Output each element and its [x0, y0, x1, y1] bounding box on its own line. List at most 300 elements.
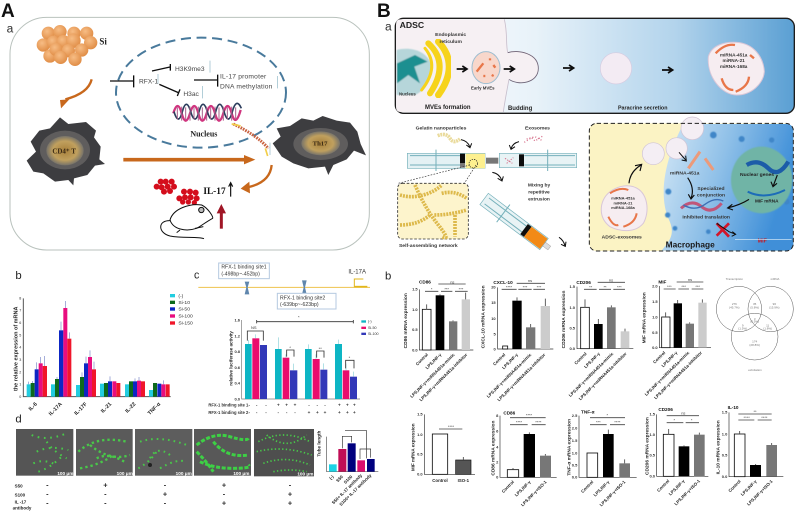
row labels: RFX-1 binding site 1 [208, 403, 249, 408]
chart: IL-10: 1.5 [722, 410, 728, 415]
chart: IL-10: 1.0 [722, 431, 728, 436]
chart: MIF: *** [695, 284, 700, 289]
chart: Venn diagram: 174 [752, 340, 757, 344]
chart: Venn diagram: (45.7%) [729, 305, 740, 309]
chart: MIF ISO-1: 1.0 [417, 432, 423, 437]
significance labels [251, 314, 351, 360]
label: IL-17A and gene mark [348, 269, 367, 287]
icon: mRNA strand [233, 124, 268, 148]
image 2 [76, 429, 133, 476]
chart: CD86: ns [450, 279, 454, 284]
chart: CXCL-10: LPS,INF-γ+miRNA451a-inhibitor [496, 352, 547, 402]
icon: exosome dots [524, 136, 543, 142]
chart: Venn diagram: 276 [732, 302, 737, 306]
chart: CD86: * [431, 286, 433, 291]
icon: nucleus [397, 49, 431, 95]
bud outline [508, 52, 538, 83]
chart: MIF: *** [681, 284, 686, 289]
row signs: + [338, 403, 341, 408]
chart: MIF ISO-1: 1.5 [417, 412, 423, 417]
chart: CD86 ISO-1: 2 [496, 460, 499, 465]
y ticks: 0.8 [234, 349, 241, 354]
icon: ADSC exosome [601, 186, 647, 231]
chart: MIF: LPS,INF-γ+miRNA451a-mimic [644, 350, 691, 397]
image 2: 100 μm [117, 471, 133, 476]
icon: right syringe [499, 150, 577, 171]
arrow: to mixing syringe [492, 172, 503, 181]
chart: TNF-α: * [607, 413, 609, 418]
chart: CD206: 0.5 [569, 325, 576, 330]
arrow: red up [217, 204, 226, 229]
binding site marker 2 [302, 280, 307, 294]
row signs: + [288, 490, 292, 499]
inset: self-assembling network [398, 183, 468, 239]
row signs: + [288, 498, 292, 507]
chart: CD206 ISO-1: * [691, 418, 693, 423]
cell: CD4 T [27, 117, 105, 185]
chart: CD206: LPS,INF-γ+miRNA451a-mimic [568, 351, 615, 398]
y axis ticks: 5 [19, 333, 21, 337]
icon: mouse [161, 205, 213, 239]
x labels: IL-6 [28, 401, 39, 412]
chart: Venn diagram: 9 [742, 324, 744, 328]
x labels: IL-17A [48, 401, 64, 417]
row signs: - [256, 403, 258, 408]
row signs: + [222, 498, 226, 507]
chart: CD206 ISO-1: 1.5 [649, 412, 656, 417]
icon: mixing syringe [477, 190, 556, 257]
label: MIF: MIF [758, 238, 768, 244]
icon: exosome with miRNA: miRNA-168a [720, 64, 748, 69]
chart: CXCL-10: CXCL-10 [493, 280, 513, 285]
chart: CD86 ISO-1: 0 [496, 475, 499, 480]
chart: TNF-α [566, 409, 637, 507]
chart: TNF-α: LPS,INF-γ [592, 479, 611, 498]
arrow: exosomes into syringe [509, 142, 519, 149]
sub-label b: b [15, 270, 22, 282]
row labels [208, 403, 249, 415]
label: Specialized conjunction: conjunction [697, 192, 725, 198]
label: Budding: Budding [508, 106, 533, 112]
y axis ticks: 2 [19, 370, 21, 374]
arrow: mRNA to translation [728, 199, 749, 210]
panel: B-a macrophage [589, 117, 793, 251]
row signs [46, 480, 292, 507]
arrow: exosome to macrophage [629, 164, 642, 183]
label: Mixing by repetitive extrusion: repetitive [528, 190, 550, 196]
row signs: - [164, 498, 167, 507]
row signs: - [46, 498, 49, 507]
row signs [249, 403, 356, 415]
icon: MIF mRNA [748, 190, 785, 195]
chart: CD206 ISO-1: 1.0 [649, 432, 656, 437]
chart: TNF-α: LPS,INF-γ+ISO-1 [599, 479, 627, 507]
panel: B-a hydrogel syringes [398, 126, 577, 257]
chart: CD206: ns [609, 277, 613, 282]
vesicles [642, 117, 704, 165]
chart: Venn diagram: Transcription [726, 277, 743, 281]
chart: MIF: 0.0 [652, 345, 658, 350]
y ticks: 0.0 [234, 396, 241, 401]
chart: CD86 ISO-1: 4 [496, 444, 499, 449]
row signs: - [265, 403, 267, 408]
chart: MIF: Control [652, 350, 666, 365]
icon: nuclear gene DNA [747, 162, 788, 172]
chart: CD86 ISO-1 [490, 410, 557, 507]
icon: connector [486, 158, 498, 164]
chart: TNF-α: Control [580, 480, 594, 494]
chart: CD86: 1.5 [412, 287, 418, 292]
chart: CXCL-10: Control [492, 352, 506, 367]
chart: CD206: 1.5 [569, 284, 576, 289]
label: Nucleus: Nucleus [399, 92, 416, 97]
row signs: + [353, 410, 356, 415]
significance labels: * [289, 345, 291, 350]
row signs: + [308, 410, 311, 415]
chart: CD86: *** [459, 286, 464, 291]
icon: blocked translation cross [717, 223, 736, 237]
panel: B-a exosome formation diagram [385, 18, 794, 113]
chart: CD206 ISO-1: LPS,INF-γ+ISO-1 [673, 478, 701, 506]
panel: B-b top row bar charts [385, 270, 793, 402]
row signs: - [256, 410, 258, 415]
label: Exosomes: Exosomes [525, 126, 550, 132]
label: Nuclear genes: Nuclear genes [740, 172, 774, 178]
y ticks: 1.6 [234, 317, 241, 322]
chart: MIF [642, 277, 711, 400]
icon: silica particle cluster [37, 25, 97, 66]
label: Macrophage: Macrophage [666, 240, 715, 250]
chart: CD86: 0.5 [412, 327, 418, 332]
chart: Venn diagram: 96 [773, 302, 776, 306]
chart: TNF-α: 2.5 [572, 413, 578, 418]
IL-6 bars [27, 363, 47, 397]
chart: MIF: 0.5 [652, 330, 658, 335]
chart: CD206: LPS,INF-γ [583, 351, 601, 369]
panel: A-b bar chart of relative mRNA expression [13, 270, 193, 417]
chart: MIF ISO-1: ISO-1 [458, 478, 470, 483]
chart: MIF: 1.0 [652, 314, 658, 319]
chart: IL-10: **** [744, 415, 750, 420]
icon: ADSC exosome: miRNA-168a [611, 205, 636, 210]
y axis ticks: 4 [19, 346, 21, 350]
chart: TNF-α: 1.5 [572, 438, 578, 443]
panel: A heading: A [1, 1, 15, 22]
panel: B heading: B [377, 1, 391, 22]
icon: released miRNA [688, 152, 713, 170]
row signs: - [249, 403, 251, 408]
row signs: - [324, 403, 326, 408]
chart: MIF: ns [688, 277, 692, 282]
x labels: S100+ IL-17 antibody [338, 472, 373, 507]
sub-label c: c [194, 270, 200, 282]
row signs: + [285, 403, 288, 408]
chart: CD86 ISO-1: 8 [496, 413, 499, 418]
binding site marker 1 [245, 282, 249, 294]
chart: MIF ISO-1: 0.5 [417, 452, 423, 457]
panel: A schematic [7, 17, 369, 250]
arrow 4 [662, 67, 673, 73]
promoter line [198, 286, 370, 289]
sub-label b: b [385, 270, 391, 282]
arrowhead [244, 155, 255, 164]
small up arrows [158, 61, 278, 155]
row signs: + [222, 480, 226, 489]
diagram frame [395, 18, 794, 113]
y axis ticks: 7 [19, 309, 21, 313]
y axis [242, 320, 360, 399]
line: MIF [735, 238, 792, 240]
chart: IL-10 [716, 405, 783, 507]
row signs: - [278, 410, 280, 415]
IL-17F bars [76, 357, 96, 397]
row signs: + [338, 410, 341, 415]
y axis ticks: 0 [19, 395, 21, 399]
chart: CD86 ISO-1: LPS,INF-γ [514, 479, 532, 498]
chart: CD86: 1.0 [412, 307, 418, 312]
chart: CD206: CD206 mRNA expression [561, 291, 567, 348]
bars [329, 443, 375, 472]
x labels: IL-21 [100, 401, 113, 415]
chart: CD206: ** [589, 284, 593, 289]
chart: IL-10: IL-10 mRNA expression [716, 420, 722, 474]
chart: CD86: CD86 [419, 279, 431, 284]
arrow: Th17 to IL-17 [241, 165, 272, 193]
row signs: + [316, 410, 319, 415]
legend: Si-10 [178, 300, 190, 306]
chart: Venn diagram: (1.5%) [738, 326, 747, 330]
label: Nucleus: Nucleus [190, 130, 217, 139]
dashed frame [589, 123, 793, 251]
chart: Venn diagram: exfoliation [748, 368, 762, 372]
row signs: - [265, 410, 267, 415]
icon: ADSC exosome: miRNA-21 [613, 200, 633, 205]
image 3 [135, 429, 192, 476]
inhibitor: RFX-1 to H3K9me3 [152, 64, 170, 71]
arrow: genes to mRNA [771, 175, 777, 187]
y ticks [234, 317, 241, 401]
row labels: RFX-1 binding site 2 [208, 410, 249, 415]
chart: CXCL-10: 5 [493, 331, 496, 336]
chart: CD86 ISO-1: **** [526, 413, 533, 418]
chart: CXCL-10: LPS,INF-γ+miRNA451a-mimic [486, 352, 533, 399]
chart: Venn diagram: (5.8%) [750, 305, 759, 309]
chart: IL-10: Control [727, 479, 742, 493]
chart: CD86: CD86 mRNA expression [403, 293, 409, 348]
callout: binding site 1 [219, 263, 269, 279]
chart: CXCL-10: 10 [491, 316, 496, 321]
chart: CD86 ISO-1: CD86 mRNA expression [490, 421, 496, 476]
IL-21 bars [100, 381, 120, 397]
significance labels: ** [319, 346, 322, 351]
chart: CD86 ISO-1: 6 [496, 428, 499, 433]
label: Inhibited translation: Inhibited translation [682, 214, 730, 220]
row signs: - [46, 490, 49, 499]
x labels: S50+ IL-17 antibody [331, 472, 363, 505]
chart: CD206: 0.0 [569, 346, 576, 351]
chart: MIF ISO-1: **** [448, 424, 455, 429]
y axis title: relative luciferase activity [229, 331, 234, 386]
row signs: - [317, 403, 319, 408]
y axis ticks [19, 297, 21, 399]
inhibitor: to promoter [194, 75, 218, 87]
icon: vesicle [600, 53, 632, 84]
chart: CD206: CD206 [576, 280, 591, 285]
callout: binding site 1: (-498bp~-452bp) [221, 272, 260, 278]
chart: CD206 ISO-1: 0.0 [649, 474, 656, 479]
arrow: miRNA down [688, 178, 694, 199]
chart: Venn diagram: 35 [753, 302, 757, 306]
chart: IL-10: 0.5 [722, 452, 728, 457]
chart: CD86 ISO-1: **** [516, 420, 523, 425]
x labels [28, 401, 163, 417]
label: IL-17A and gene mark: IL-17A [348, 269, 366, 275]
chart: CXCL-10: *** [537, 284, 542, 289]
icon: exosome with miRNA: miRNA-21 [723, 58, 745, 63]
row signs: + [103, 480, 107, 489]
x labels: TNF-α [147, 401, 163, 417]
chart: TNF-α: 2.0 [572, 425, 578, 430]
chart: Venn diagram: (28.8%) [749, 343, 760, 347]
chart: CXCL-10: **** [506, 284, 513, 289]
cell: CD4 T: CD4⁺ T [52, 147, 76, 155]
chart: TNF-α: TNF-α mRNA expression [566, 419, 572, 476]
chart: TNF-α: 0.5 [572, 463, 578, 468]
chart: CD86: 0.0 [412, 347, 418, 352]
legend: (-) [178, 293, 184, 299]
chart: TNF-α: 1.0 [572, 450, 578, 455]
nucleus dashed ellipse [116, 38, 286, 148]
chart: CD86 ISO-1: **** [535, 420, 542, 425]
label: Gelatin nanoparticles: Gelatin nanoparticles [416, 126, 467, 132]
macrophage body [662, 124, 793, 251]
icon: exosome with miRNA [708, 42, 764, 95]
callout: binding site 2: RFX-1 binding site2 [280, 296, 325, 302]
panel frame [10, 17, 369, 250]
icon: endoplasmic reticulum [422, 42, 449, 95]
icon: ADSC exosome: miRNA-451a [611, 196, 636, 201]
chart: CD206: LPS,INF-γ+miRNA451a-inhibitor [578, 351, 628, 401]
region: cell cytoplasm [396, 19, 538, 112]
y ticks: 1.2 [234, 333, 241, 338]
x labels: S100 [343, 474, 354, 485]
row labels [13, 483, 32, 510]
label: miRNA-451a: miRNA-451a [670, 170, 700, 176]
row labels: IL -17 [15, 500, 27, 505]
bars group 1 [245, 338, 267, 399]
image 4 [194, 429, 251, 476]
image 3: 100 μm [176, 471, 192, 476]
row labels: S100 [15, 492, 26, 497]
chart: Venn diagram: (15.9%) [769, 305, 780, 309]
chart: CD86 ISO-1: Control [501, 480, 515, 494]
chart: CD206 ISO-1: CD206 [658, 407, 673, 412]
image 1: 100 μm [57, 471, 73, 476]
legend [170, 293, 193, 327]
row labels: antibody [13, 505, 32, 510]
callout lines to inset [398, 165, 476, 183]
significance brackets [247, 320, 354, 368]
chart: CXCL-10: ns [528, 278, 532, 283]
row signs: + [324, 410, 327, 415]
significance labels: * [349, 355, 351, 360]
chart: MIF: LPS,INF-γ [660, 350, 679, 368]
chart: TNF-α: TNF-α [581, 409, 595, 414]
chart: CD206: ** [603, 284, 607, 289]
chart: MIF ISO-1 [410, 412, 475, 483]
chart: IL-10: LPS,INF-γ+ISO-1 [746, 478, 774, 507]
arrow 3 [563, 65, 574, 71]
panel: A-c legend: Si-100 [368, 332, 379, 336]
row signs: - [223, 490, 226, 499]
sub-label a: a [7, 22, 14, 36]
label: Mixing by repetitive extrusion: Mixing by [528, 182, 550, 188]
callout: binding site 2: (-639bp~-623bp) [280, 302, 319, 308]
x labels: (-) [328, 474, 335, 481]
TNF bars [149, 383, 170, 397]
image 5 [254, 429, 314, 476]
chart: CD86: Control [415, 352, 429, 367]
chart: CXCL-10: 15 [491, 300, 496, 305]
chart: CD206: Control [573, 351, 588, 366]
image 1 [16, 429, 73, 476]
frame [589, 123, 793, 251]
label: Mixing by repetitive extrusion: extrusion [528, 197, 550, 203]
arrow: IL-17 up [229, 183, 233, 197]
y axis ticks: 8 [19, 297, 21, 301]
row signs: + [346, 403, 349, 408]
legend: Si-150 [178, 321, 193, 327]
arrow 2 [504, 66, 514, 72]
chart: CD86: LPS,INF-γ [424, 352, 443, 370]
row signs: - [286, 410, 288, 415]
IL-17A bars [51, 308, 71, 397]
arrow: mixing output [559, 237, 566, 246]
label: Si: Si [99, 36, 107, 46]
chart: CD206 [561, 277, 633, 401]
label: ADSC: ADSC [400, 20, 425, 30]
chart: CD206: *** [617, 284, 622, 289]
brackets [342, 431, 371, 459]
icon: gelatin nanoparticles [438, 134, 460, 142]
bars group 2 [275, 349, 297, 399]
chart: CD206 ISO-1 [644, 407, 708, 506]
panel: A-c legend: (-) [368, 320, 372, 324]
label: Early MVEs: Early MVEs [471, 86, 495, 91]
chart: MIF ISO-1: Control [432, 478, 448, 483]
error bars [29, 301, 163, 384]
arrow: CD4 T to Th17 [123, 154, 245, 165]
chart: MIF ISO-1: 0.0 [417, 472, 423, 477]
chart: CD86: LPS,INF-γ+miRNA451a-mimic [409, 352, 456, 399]
panel: A-c luciferase chart and promoter map [194, 263, 370, 415]
row labels: S50 [15, 483, 23, 488]
arrow: gelatin into syringe [461, 140, 472, 148]
chart: CXCL-10: 0 [493, 346, 496, 351]
chart: CD206 ISO-1: 0.5 [649, 453, 656, 458]
sub-label a: a [385, 20, 392, 34]
row signs: + [294, 403, 297, 408]
chart: MIF: 2.0 [652, 283, 658, 288]
y axis ticks: 3 [19, 358, 21, 362]
row signs: - [289, 480, 292, 489]
chart: CD206 ISO-1: Control [656, 479, 670, 493]
chart: Venn diagram: mRNA [771, 277, 779, 281]
inhibitor: to RFX-1 [110, 75, 134, 87]
row signs: - [164, 480, 167, 489]
chart: CD206 ISO-1: * [674, 418, 676, 423]
x labels: IL-17F [73, 401, 89, 417]
